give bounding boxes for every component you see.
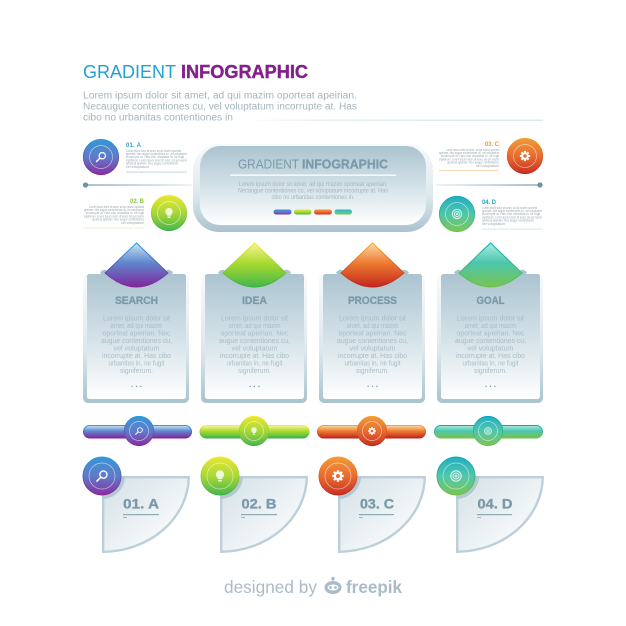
card text: oporteat apeirian. Nec (220, 330, 289, 338)
label: 03. C (360, 496, 394, 512)
slider: search (84, 416, 192, 446)
icon badge (319, 457, 357, 495)
text block 03 C: vel voluptatum (476, 164, 499, 168)
card text: urbanitas in, ne fugit (344, 360, 401, 368)
card text: Lorem ipsum dolor sit (457, 316, 524, 322)
card text: augue contentiones cu, (219, 338, 290, 345)
text block 03 C: signiferum. Lorem ipsum dolor sit amet, ad qui mazim (439, 157, 499, 161)
central heading text (238, 158, 388, 172)
text block 02 B: signiferum. Lorem ipsum dolor sit amet, ad qui mazim (84, 214, 144, 218)
card title: PROCESS (348, 295, 397, 307)
card text: urbanitas in, ne fugit (226, 360, 283, 368)
text block 02 B: Lorem ipsum dolor sit amet, ad qui mazim oporteat (89, 205, 144, 209)
card text: augue contentiones cu, (101, 338, 172, 345)
text block 04 D: incorrupte at. Has cibo urbanitas in, ne fugit (482, 212, 540, 216)
slider: goal (434, 416, 542, 446)
card text: Lorem ipsum dolor sit (339, 316, 406, 322)
text block 04 D: 04. D (482, 200, 497, 206)
quarter panel 03 C (319, 457, 425, 552)
card text (337, 316, 408, 389)
central body text: Lorem ipsum dolor sit amet, ad qui mazim oporteat apeirian. (238, 182, 388, 188)
footer credit (224, 577, 402, 597)
intro paragraph: cibo no urbanitas contentiones in (83, 112, 233, 124)
card text: ... (249, 380, 260, 389)
text block 02 B: apeirian. Nec augue contentiones cu, vel voluptatum (84, 208, 144, 212)
text block 02 B: vel voluptatum (121, 221, 144, 225)
slider: idea (200, 416, 309, 446)
quarter panel 01 A (83, 457, 189, 552)
text block 03 C: incorrupte at. Has cibo urbanitas in, ne fugit (441, 154, 499, 158)
badge 03 C (507, 138, 543, 174)
quarter panel 04 D (437, 457, 543, 552)
text block 02 B: incorrupte at. Has cibo urbanitas in, ne fugit (86, 211, 144, 215)
card text: vel voluptatum (468, 346, 514, 352)
central body text (238, 182, 388, 201)
label: 02. B (242, 496, 276, 512)
card text: ... (485, 380, 496, 389)
central body text: Necaugue contentiones cu, vel voluptatum incorrupte at. Has (238, 188, 388, 194)
card text: signiferum. (238, 368, 271, 375)
central body text: cibo no urbanitas contentiones in. (272, 195, 355, 201)
card text: ... (131, 380, 142, 389)
icon: idea tab (223, 243, 286, 287)
title (83, 62, 308, 82)
quarter panel 02 B (201, 457, 307, 552)
colour pills (274, 210, 352, 214)
text block 01 A: incorrupte at. Has cibo urbanitas in, ne fugit (126, 155, 184, 159)
panel: goal card (437, 243, 543, 403)
text block 02 B (84, 199, 145, 229)
text block 04 D: oporteat apeirian. Nec augue contentiones (482, 219, 534, 223)
footer credit: freepik (346, 577, 402, 597)
text block 04 D: apeirian. Nec augue contentiones cu, vel voluptatum (482, 209, 542, 213)
intro paragraph: Lorem ipsum dolor sit amet, ad qui mazim oporteat apeirian. (83, 90, 357, 102)
text block 01 A: signiferum. Lorem ipsum dolor sit amet, ad qui mazim (126, 158, 187, 162)
text block 04 D: Lorem ipsum dolor sit amet, ad qui mazim oporteat (482, 206, 537, 210)
card text: vel voluptatum (350, 346, 396, 352)
panel: search card (83, 243, 189, 403)
label: 04. D (478, 496, 512, 512)
central heading text: INFOGRAPHIC (302, 158, 388, 172)
icon: process tab (341, 243, 404, 287)
text block 01 A: vel voluptatum (126, 165, 149, 169)
text block 02 B: 02. B (130, 199, 145, 205)
badge 04 D (439, 196, 475, 232)
text block 04 D: vel voluptatum (482, 222, 505, 226)
card text: urbanitas in, ne fugit (462, 360, 519, 368)
text block 01 A (126, 143, 187, 173)
intro paragraph: Necaugue contentiones cu, vel voluptatum incorrupte at. Has (83, 102, 357, 112)
text block 03 C: apeirian. Nec augue contentiones cu, vel voluptatum (439, 151, 499, 155)
card text (455, 316, 526, 389)
panel: process card (319, 243, 425, 403)
text block 04 D: signiferum. Lorem ipsum dolor sit amet, ad qui mazim (482, 215, 542, 219)
card text: Lorem ipsum dolor sit (103, 316, 170, 322)
card text: signiferum. (120, 368, 153, 375)
card text: oporteat apeirian. Nec (456, 330, 525, 338)
badge 01 A (83, 139, 119, 175)
card text: augue contentiones cu, (337, 338, 408, 345)
card title: SEARCH (115, 295, 158, 307)
connector line left (83, 182, 192, 188)
card text: incorrupte at. Has cibo (338, 353, 407, 360)
card text (101, 316, 172, 389)
card text: amet, ad qui mazim (110, 323, 163, 330)
card text: vel voluptatum (232, 346, 278, 352)
text block 04 D (482, 200, 543, 230)
card text: amet, ad qui mazim (346, 323, 399, 330)
icon: goal tab (459, 243, 522, 287)
card text: incorrupte at. Has cibo (456, 353, 525, 360)
slider: process (318, 416, 426, 446)
card text: incorrupte at. Has cibo (102, 353, 171, 360)
card text: Lorem ipsum dolor sit (221, 316, 288, 322)
card text (219, 316, 290, 389)
card text: signiferum. (474, 368, 507, 375)
icon: search tab (105, 243, 168, 287)
badge 02 B (151, 195, 187, 231)
text block 01 A: apeirian. Nec augue contentiones cu, vel voluptatum (126, 152, 187, 156)
intro paragraph (83, 90, 357, 124)
text block 03 C (439, 142, 500, 171)
label: 01. A (123, 496, 159, 512)
icon badge (437, 457, 475, 495)
card text: oporteat apeirian. Nec (338, 330, 407, 338)
card text: oporteat apeirian. Nec (102, 330, 171, 338)
panel: idea card (201, 243, 307, 403)
text block 03 C: oporteat apeirian. Nec augue contentiones (447, 161, 499, 165)
card text: ... (367, 380, 378, 389)
card text: vel voluptatum (114, 346, 160, 352)
card text: amet, ad qui mazim (464, 323, 517, 330)
text block 03 C: 03. C (485, 142, 500, 148)
title: GRADIENT (83, 62, 176, 82)
card text: urbanitas in, ne fugit (108, 360, 165, 368)
card title: IDEA (242, 295, 267, 307)
text block 01 A: Lorem ipsum dolor sit amet, ad qui mazim oporteat (126, 149, 181, 153)
card title: GOAL (476, 295, 505, 307)
text block 01 A: oporteat apeirian. Nec augue contentiones (126, 162, 178, 166)
card text: amet, ad qui mazim (228, 323, 281, 330)
central heading text: GRADIENT (238, 158, 299, 172)
connector line right (436, 182, 543, 188)
panel: central heading (193, 144, 433, 232)
icon: freepik mascot (324, 577, 342, 594)
card text: incorrupte at. Has cibo (220, 353, 289, 360)
card text: augue contentiones cu, (455, 338, 526, 345)
card text: signiferum. (356, 368, 389, 375)
icon badge (83, 457, 121, 495)
footer credit: designed by (224, 577, 317, 597)
icon badge (201, 457, 239, 495)
text block 03 C: Lorem ipsum dolor sit amet, ad qui mazim oporteat (446, 148, 499, 152)
title: INFOGRAPHIC (181, 62, 308, 82)
text block 02 B: oporteat apeirian. Nec augue contentiones (92, 218, 144, 222)
text block 01 A: 01. A (126, 143, 142, 149)
